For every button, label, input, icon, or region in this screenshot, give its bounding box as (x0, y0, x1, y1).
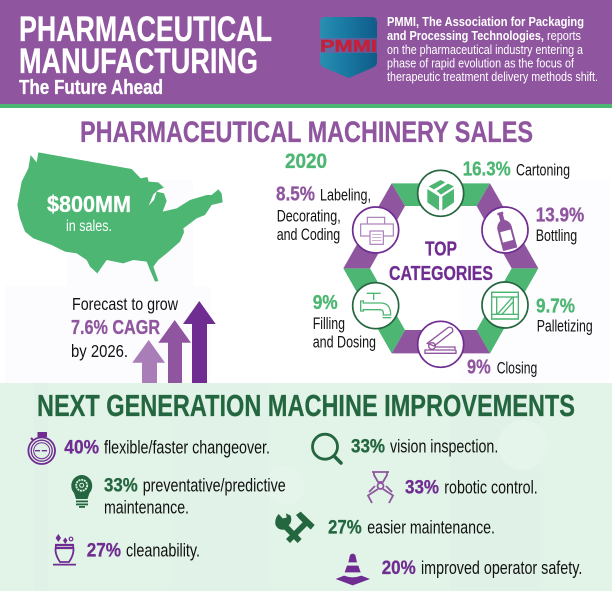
title: The Future Ahead (19, 77, 163, 99)
sales figure: $800MM (47, 191, 131, 217)
icon: magnifier (312, 434, 341, 463)
icon: stopwatch (28, 432, 55, 464)
item: preventative maintenance (104, 475, 286, 517)
PMMI logo: PMMI (320, 36, 377, 56)
center label: CATEGORIES (389, 262, 493, 285)
icon: crate (482, 282, 528, 328)
label: closing (467, 356, 537, 378)
icon: wrench and hammer (275, 512, 315, 543)
icon: faucet (353, 283, 399, 329)
item: operator safety (382, 557, 582, 579)
label: palletizing: Palletizing (537, 318, 593, 336)
item: vision inspection: 33% (351, 436, 385, 458)
label: labeling: 8.5% (276, 184, 315, 206)
intro text: PMMI, The Association for Packaging (387, 15, 584, 29)
item: easier maintenance: easier maintenance. (367, 517, 495, 537)
item: robotic control (405, 476, 538, 498)
label: labeling: and Coding (277, 226, 340, 244)
item: changeover: flexible/faster changeover. (104, 437, 270, 457)
item: cleanability (87, 540, 200, 562)
item: robotic control: 33% (405, 476, 439, 498)
icon: carton box (418, 170, 464, 216)
hexagon diagram: top categories (343, 170, 538, 367)
label: palletizing (536, 296, 593, 336)
icon: bottle (482, 207, 528, 253)
label: bottling: 13.9% (536, 205, 584, 227)
icon: robotic claw (368, 472, 393, 503)
sales figure (47, 191, 131, 235)
intro text (387, 15, 598, 84)
forecast text: 7.6% CAGR (71, 317, 160, 339)
label: closing: Closing (497, 359, 537, 377)
intro text: phase of rapid evolution as the focus of (387, 56, 574, 70)
title: MANUFACTURING (19, 42, 258, 81)
header banner (0, 0, 612, 108)
item: operator safety: 20% (382, 557, 416, 579)
title (19, 10, 272, 99)
title: PHARMACEUTICAL (19, 10, 272, 49)
item: preventative maintenance: 33% (104, 475, 138, 497)
intro text: on the pharmaceutical industry entering a (387, 43, 583, 57)
label: bottling: Bottling (536, 227, 577, 245)
item: vision inspection (351, 436, 498, 458)
item: robotic control: robotic control. (444, 477, 538, 497)
item: easier maintenance (328, 516, 495, 538)
item: easier maintenance: 27% (328, 516, 362, 538)
label: cartoning (463, 159, 570, 181)
item: preventative maintenance: maintenance. (104, 497, 189, 517)
item: changeover: 40% (64, 436, 99, 458)
label: closing: 9% (467, 356, 491, 378)
label: filling and dosing: 9% (313, 292, 338, 314)
center label (389, 238, 493, 285)
label: labeling: Labeling, (320, 187, 371, 205)
label: filling and dosing: Filling (313, 315, 345, 333)
icon: cleaning bucket (53, 534, 76, 565)
label: filling and dosing (313, 292, 376, 352)
growth arrows (132, 301, 216, 383)
intro text: and Processing Technologies, reports (387, 29, 581, 43)
label: filling and dosing: and Dosing (313, 334, 376, 352)
label: labeling: Decorating, (277, 208, 341, 226)
label: cartoning: 16.3% (463, 159, 511, 181)
label: cartoning: Cartoning (516, 162, 570, 180)
center label: TOP (425, 238, 457, 261)
forecast text (71, 294, 178, 361)
icon: printer (353, 207, 399, 253)
label: bottling (536, 205, 584, 245)
item: changeover (64, 436, 270, 458)
forecast text: Forecast to grow (72, 294, 178, 314)
icon: light bulb (71, 475, 92, 508)
item: cleanability: cleanability. (126, 541, 200, 561)
sales figure: in sales. (66, 218, 112, 235)
forecast text: by 2026. (71, 341, 128, 361)
PMMI logo (320, 17, 377, 78)
item: cleanability: 27% (87, 540, 121, 562)
year label: 2020 (285, 150, 327, 173)
item: preventative maintenance: preventative/predictive (143, 476, 286, 496)
map of the United States (17, 152, 223, 282)
label: labeling (276, 184, 371, 244)
label: palletizing: 9.7% (536, 296, 575, 318)
icon: stapler (418, 321, 464, 367)
item: vision inspection: vision inspection. (390, 437, 498, 457)
icon: traffic cone (336, 554, 370, 585)
